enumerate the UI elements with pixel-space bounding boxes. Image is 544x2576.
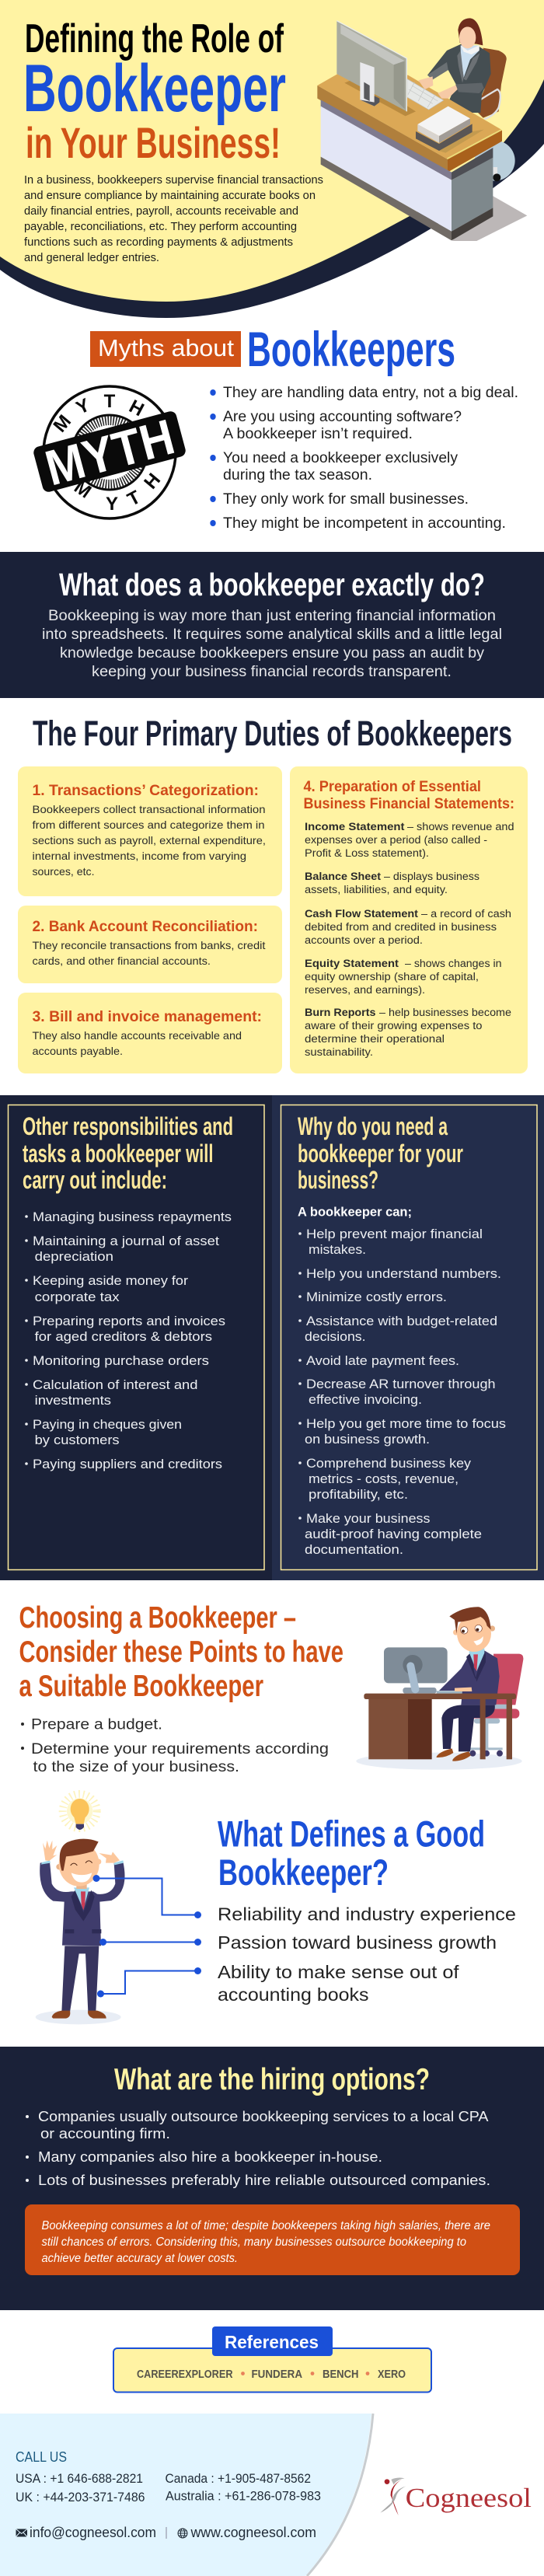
panel: other responsibilities: Other responsibilities and xyxy=(23,1112,233,1140)
card 4: financial statements: Profit & Loss statement). xyxy=(305,847,429,859)
card 4: financial statements: sustainability. xyxy=(305,1046,373,1058)
panel: other responsibilities: by customers xyxy=(35,1433,120,1447)
heading: myths about bookkeepers: Myths about xyxy=(98,334,234,361)
illustration: happy man with light bulb xyxy=(36,1794,125,2024)
footer panel: contact: info@cogneesol.com xyxy=(30,2525,156,2540)
panel: hiring options: Companies usually outsource bookkeeping services to a local CPA xyxy=(38,2108,489,2124)
panel: why do you need a bookkeeper: effective invoicing. xyxy=(309,1392,422,1407)
card 4: financial statements xyxy=(290,766,528,1073)
illustration: man at computer xyxy=(356,1607,523,1770)
footer panel: contact xyxy=(0,2414,373,2576)
panel: why do you need a bookkeeper: audit-proof having complete xyxy=(305,1527,482,1541)
panel: other responsibilities: corporate tax xyxy=(35,1290,120,1304)
references box: CAREEREXPLORER xyxy=(137,2368,233,2381)
panel: why do you need a bookkeeper: business? xyxy=(298,1166,378,1194)
icon: envelope xyxy=(16,2529,27,2537)
panel: hiring options xyxy=(0,2047,544,2310)
intro text: In a business, bookkeepers supervise financial transactions xyxy=(24,173,323,187)
references box xyxy=(113,2326,431,2393)
intro text: and ensure compliance by maintaining accurate books on xyxy=(24,189,316,202)
card 4: financial statements: – help businesses become xyxy=(379,1007,511,1018)
list: choosing points: to the size of your business. xyxy=(33,1759,239,1775)
footer panel: contact: Australia : +61-286-078-983 xyxy=(166,2489,321,2503)
list: myths: They only work for small businesses. xyxy=(223,491,469,508)
heading: choosing a bookkeeper: Consider these Points to have xyxy=(19,1635,343,1669)
panel: why do you need a bookkeeper: Avoid late payment fees. xyxy=(306,1353,459,1368)
panel: why do you need a bookkeeper: Comprehend business key xyxy=(306,1456,472,1471)
panel: other responsibilities xyxy=(0,1095,272,1580)
panel: why do you need a bookkeeper: Why do you need a xyxy=(298,1112,448,1140)
card 4: financial statements: equity ownership (share of capital, xyxy=(305,971,479,983)
panel: other responsibilities: Paying suppliers and creditors xyxy=(33,1457,222,1471)
list: good bookkeeper qualities: Ability to make sense out of xyxy=(218,1962,459,1982)
icon: myth stamp: H xyxy=(126,396,148,421)
list: myths: They might be incompetent in accounting. xyxy=(223,515,506,532)
callout: outsourcing note: Bookkeeping consumes a lot of time; despite bookkeepers taking high salaries, there are xyxy=(42,2219,490,2232)
panel: what does a bookkeeper do: Bookkeeping is way more than just entering financial information xyxy=(48,608,496,624)
card 3: bill and invoice management: accounts payable. xyxy=(33,1045,123,1057)
card 4: financial statements: Business Financial Statements: xyxy=(303,796,514,812)
list: good bookkeeper qualities xyxy=(218,1904,516,2005)
panel: why do you need a bookkeeper: Decrease AR turnover through xyxy=(306,1377,496,1391)
card 2: bank account reconciliation xyxy=(18,906,282,983)
title: Defining the Role of xyxy=(25,16,284,61)
panel: other responsibilities: Monitoring purchase orders xyxy=(33,1353,209,1368)
hero panel: yellow curved background xyxy=(0,0,544,318)
card 4: financial statements: – displays business xyxy=(384,871,479,882)
connector lines from man to qualities xyxy=(93,1875,201,1998)
intro text: and general ledger entries. xyxy=(24,251,159,264)
panel: other responsibilities: Maintaining a journal of asset xyxy=(33,1234,219,1248)
heading: choosing a bookkeeper: a Suitable Bookkeeper xyxy=(19,1670,263,1703)
card 4: financial statements: – shows revenue and xyxy=(407,821,514,832)
panel: other responsibilities: Managing business repayments xyxy=(33,1209,232,1224)
panel: why do you need a bookkeeper: Make your business xyxy=(306,1511,431,1526)
icon: myth stamp: T xyxy=(104,391,116,412)
card 1: transactions categorization: sources, etc. xyxy=(33,865,95,878)
title: in Your Business! xyxy=(26,118,281,167)
panel: other responsibilities: Preparing reports and invoices xyxy=(33,1314,225,1328)
list: choosing points: Prepare a budget. xyxy=(31,1716,162,1733)
list: myths xyxy=(210,385,518,532)
icon: myth stamp: Y xyxy=(73,395,93,419)
panel: other responsibilities: for aged creditors & debtors xyxy=(35,1329,212,1344)
panel: why do you need a bookkeeper xyxy=(272,1095,544,1580)
icon: myth stamp: H xyxy=(140,469,165,493)
card 3: bill and invoice management: 3. Bill and invoice management: xyxy=(33,1009,262,1025)
footer panel: contact: UK : +44-203-371-7486 xyxy=(16,2490,145,2504)
panel: why do you need a bookkeeper: Minimize costly errors. xyxy=(306,1290,447,1304)
card 4: financial statements: Cash Flow Statement xyxy=(305,908,419,920)
card 4: financial statements: Burn Reports xyxy=(305,1007,376,1018)
footer panel: contact: USA : +1 646-688-2821 xyxy=(16,2471,143,2486)
icon: myth stamp: MYTH xyxy=(40,408,180,496)
callout: outsourcing note xyxy=(25,2204,520,2275)
card 2: bank account reconciliation: 2. Bank Account Reconciliation: xyxy=(33,919,258,935)
card 4: financial statements: 4. Preparation of Essential xyxy=(303,779,481,795)
card 1: transactions categorization: internal investments, income from varying xyxy=(33,850,246,862)
references box: BENCH xyxy=(323,2368,359,2381)
card 4: financial statements: expenses over a period (also called - xyxy=(305,834,487,846)
panel: hiring options: Many companies also hire a bookkeeper in-house. xyxy=(38,2148,382,2165)
panel: what does a bookkeeper do xyxy=(0,552,544,698)
panel: other responsibilities: carry out include: xyxy=(23,1166,167,1194)
card 2: bank account reconciliation: They reconcile transactions from banks, credit xyxy=(33,939,266,951)
list: myths: A bookkeeper isn’t required. xyxy=(223,426,413,442)
intro text: functions such as recording payments & adjustments xyxy=(24,236,293,249)
panel: why do you need a bookkeeper: profitability, etc. xyxy=(309,1487,408,1502)
panel: why do you need a bookkeeper: Help you understand numbers. xyxy=(306,1266,501,1281)
panel: what does a bookkeeper do: into spreadsheets. It requires some analytical skills and a little legal xyxy=(42,627,502,643)
panel: why do you need a bookkeeper: Help prevent major financial xyxy=(306,1227,483,1241)
title: Bookkeeper xyxy=(23,51,286,126)
card 4: financial statements: – a record of cash xyxy=(421,908,511,920)
card 2: bank account reconciliation: cards, and other financial accounts. xyxy=(33,955,211,967)
callout: outsourcing note: achieve better accuracy at lower costs. xyxy=(42,2252,238,2265)
footer panel: contact: CALL US xyxy=(16,2449,67,2465)
panel: what does a bookkeeper do: keeping your business financial records transparent. xyxy=(92,664,452,680)
list: myths: You need a bookkeeper exclusively xyxy=(223,450,459,466)
panel: other responsibilities: tasks a bookkeeper will xyxy=(23,1140,213,1168)
list: good bookkeeper qualities: Reliability and industry experience xyxy=(218,1904,516,1925)
icon: myth stamp: T xyxy=(124,487,145,511)
icon: myth stamp: M xyxy=(49,411,75,437)
footer panel: contact: Canada : +1-905-487-8562 xyxy=(165,2471,311,2486)
panel: other responsibilities: Paying in cheques given xyxy=(33,1417,182,1432)
card 1: transactions categorization: from different sources and categorize them in xyxy=(33,819,264,831)
panel: why do you need a bookkeeper: bookkeeper for your xyxy=(298,1140,463,1168)
list: good bookkeeper qualities: accounting books xyxy=(218,1984,368,2005)
intro text xyxy=(24,173,323,264)
panel: hiring options: Lots of businesses preferably hire reliable outsourced companies. xyxy=(38,2172,490,2188)
panel: why do you need a bookkeeper: Assistance with budget-related xyxy=(306,1314,497,1328)
heading: choosing a bookkeeper: Choosing a Bookkeeper – xyxy=(19,1601,296,1635)
panel: why do you need a bookkeeper: decisions. xyxy=(305,1329,365,1344)
card 1: transactions categorization: Bookkeepers collect transactional information xyxy=(33,803,266,815)
card 1: transactions categorization xyxy=(18,766,282,896)
list: myths: Are you using accounting software? xyxy=(223,409,462,425)
card 4: financial statements: Income Statement xyxy=(305,821,405,832)
card 4: financial statements: assets, liabilities, and equity. xyxy=(305,884,448,895)
panel: other responsibilities: Calculation of interest and xyxy=(33,1377,197,1392)
panel: why do you need a bookkeeper: Help you get more time to focus xyxy=(306,1416,506,1431)
card 1: transactions categorization: 1. Transactions’ Categorization: xyxy=(33,783,259,799)
list: myths: during the tax season. xyxy=(223,467,372,483)
intro text: daily financial entries, payroll, accounts receivable and xyxy=(24,204,298,218)
card 4: financial statements: debited from and credited in business xyxy=(305,921,497,933)
references box: XERO xyxy=(378,2368,406,2381)
icon: globe xyxy=(178,2529,187,2538)
card 4: financial statements: reserves, and earnings). xyxy=(305,984,425,996)
list: good bookkeeper qualities: Passion toward business growth xyxy=(218,1932,497,1953)
panel: why do you need a bookkeeper: on business growth. xyxy=(305,1432,430,1447)
logo: cogneesol: Cogneesol xyxy=(406,2483,532,2513)
heading: myths about bookkeepers xyxy=(90,323,455,377)
icon: myth stamp: M xyxy=(70,476,95,503)
footer panel: contact: www.cogneesol.com xyxy=(190,2525,316,2540)
panel: why do you need a bookkeeper: documentation. xyxy=(305,1542,403,1557)
heading: what defines a good bookkeeper xyxy=(218,1813,485,1893)
heading: choosing a bookkeeper xyxy=(19,1601,343,1703)
panel: why do you need a bookkeeper: mistakes. xyxy=(309,1242,366,1257)
list: choosing points xyxy=(21,1716,329,1775)
list: myths: They are handling data entry, not a big deal. xyxy=(223,385,518,401)
card 3: bill and invoice management: They also handle accounts receivable and xyxy=(33,1029,242,1042)
panel: hiring options: What are the hiring options? xyxy=(114,2063,430,2096)
panel: other responsibilities: investments xyxy=(35,1393,111,1408)
card 4: financial statements: determine their operational xyxy=(305,1033,445,1045)
card 4: financial statements: – shows changes in xyxy=(405,958,502,969)
card 4: financial statements: Balance Sheet xyxy=(305,871,382,882)
title xyxy=(23,16,286,167)
panel: other responsibilities: depreciation xyxy=(35,1249,113,1264)
card 4: financial statements: accounts over a period. xyxy=(305,934,423,946)
icon: myth stamp xyxy=(32,386,187,518)
panel: why do you need a bookkeeper: metrics - costs, revenue, xyxy=(309,1471,459,1486)
heading: what defines a good bookkeeper: Bookkeeper? xyxy=(218,1852,389,1893)
callout: outsourcing note: still chances of errors. Considering this, many businesses outsource bookkeeping to xyxy=(42,2236,466,2249)
card 4: financial statements: Equity Statement xyxy=(305,958,399,969)
panel: hiring options: or accounting firm. xyxy=(40,2125,170,2141)
panel: why do you need a bookkeeper: A bookkeeper can; xyxy=(298,1205,412,1219)
card 4: financial statements: aware of their growing expenses to xyxy=(305,1020,482,1031)
logo: cogneesol xyxy=(380,2477,532,2515)
intro text: payable, reconciliations, etc. They perform accounting xyxy=(24,220,297,233)
list: choosing points: Determine your requirements according xyxy=(31,1741,329,1757)
panel: other responsibilities: Keeping aside money for xyxy=(33,1273,188,1288)
references box: FUNDERA xyxy=(252,2368,302,2381)
card 1: transactions categorization: sections such as payroll, external expenditure, xyxy=(33,834,266,846)
card 3: bill and invoice management xyxy=(18,993,282,1073)
references box: References xyxy=(225,2332,319,2352)
illustration: woman working at desk xyxy=(317,18,527,241)
panel: what does a bookkeeper do: knowledge because bookkeepers ensure you pass an audit by xyxy=(60,645,485,661)
icon: myth stamp: Y xyxy=(106,494,118,515)
